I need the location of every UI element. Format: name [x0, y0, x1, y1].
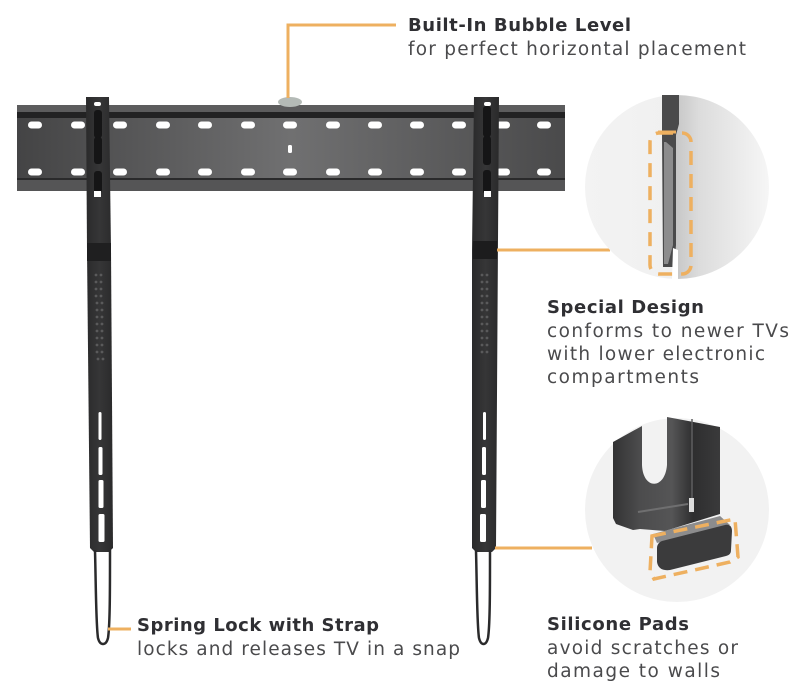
callout: special design: Special Design: [547, 297, 704, 318]
callout: special design: compartments: [547, 367, 699, 388]
wall plate: [17, 105, 565, 191]
callout: spring lock with strap: Spring Lock with Strap: [137, 615, 379, 636]
callout: built-in bubble level: Built-In Bubble Level: [408, 15, 631, 36]
panel: silicone pads detail: [585, 417, 769, 602]
icon: bubble level: [278, 97, 302, 107]
right spring strap: [476, 550, 490, 644]
callout: silicone pads: Silicone Pads: [547, 614, 689, 635]
leader line: spring lock: [108, 628, 131, 630]
callout: spring lock with strap: locks and releases TV in a snap: [137, 639, 460, 660]
right bracket arm: [472, 97, 499, 552]
left spring strap: [95, 550, 110, 644]
callout: built-in bubble level: [408, 15, 746, 60]
callout: silicone pads: [547, 614, 738, 682]
leader line: special design: [497, 248, 610, 252]
panel: special design detail: [585, 95, 769, 279]
callout: silicone pads: damage to walls: [547, 661, 720, 682]
callout: special design: with lower electronic: [547, 344, 765, 365]
callout: built-in bubble level: for perfect horizontal placement: [408, 39, 746, 60]
left bracket arm: [86, 97, 113, 552]
leader line: bubble level: [288, 25, 396, 98]
callout: special design: conforms to newer TVs: [547, 321, 789, 342]
callout: special design: [547, 297, 789, 388]
callout: spring lock with strap: [137, 615, 460, 660]
leader line: silicone pads: [495, 546, 592, 550]
callout: silicone pads: avoid scratches or: [547, 638, 738, 659]
